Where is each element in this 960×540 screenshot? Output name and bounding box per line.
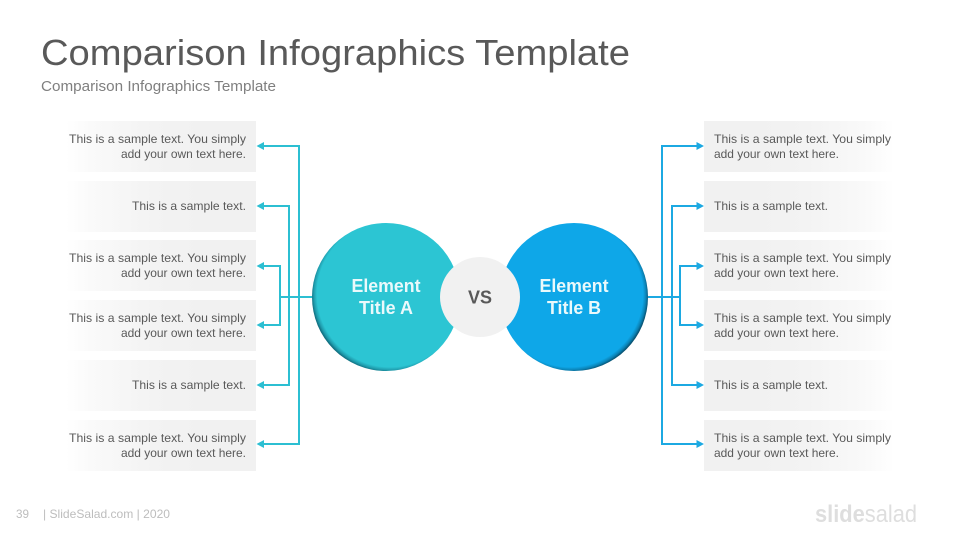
title: Comparison Infographics Template [41, 32, 630, 73]
text box: left row 5: This is a sample text. [132, 378, 246, 392]
footer: page number: 39 [16, 507, 29, 521]
text box: right row 1: add your own text here. [714, 147, 839, 161]
arrows: right connectors [648, 142, 704, 448]
logo: slidesalad: slidesalad [815, 501, 917, 528]
text box: right row 5 [704, 360, 894, 411]
text box: left row 2 [66, 181, 256, 232]
text box: right row 3 [704, 240, 894, 291]
text box: right row 5: This is a sample text. [714, 378, 828, 392]
text box: left row 5 [66, 360, 256, 411]
circle: element B [500, 223, 648, 371]
text box: left row 6: This is a sample text. You simply [69, 431, 246, 445]
panel: left text boxes [66, 121, 256, 471]
badge: VS: VS [468, 288, 492, 308]
text box: right row 1 [704, 121, 894, 172]
text box: left row 3: add your own text here. [121, 266, 246, 280]
text box: right row 6: add your own text here. [714, 446, 839, 460]
text box: right row 6: This is a sample text. You simply [714, 431, 891, 445]
circle: element B: Element [540, 275, 608, 296]
text box: left row 1: add your own text here. [121, 147, 246, 161]
text box: left row 1: This is a sample text. You simply [69, 132, 246, 146]
text box: left row 1 [66, 121, 256, 172]
text box: right row 6 [704, 420, 894, 471]
text box: left row 3: This is a sample text. You simply [69, 251, 246, 265]
text box: right row 4: This is a sample text. You simply [714, 311, 891, 325]
text box: left row 3 [66, 240, 256, 291]
circle: element A: Element [352, 275, 420, 296]
arrows: left connectors [256, 142, 312, 448]
text box: left row 6 [66, 420, 256, 471]
text box: left row 2: This is a sample text. [132, 199, 246, 213]
subtitle: Comparison Infographics Template [41, 79, 276, 95]
text box: right row 3: This is a sample text. You simply [714, 251, 891, 265]
text box: right row 4 [704, 300, 894, 351]
text box: right row 4: add your own text here. [714, 326, 839, 340]
text box: right row 2 [704, 181, 894, 232]
circle: element A [312, 223, 460, 371]
text box: left row 4: add your own text here. [121, 326, 246, 340]
text box: left row 4 [66, 300, 256, 351]
text box: right row 2: This is a sample text. [714, 199, 828, 213]
text box: right row 3: add your own text here. [714, 266, 839, 280]
circle: element A: Title A [359, 297, 413, 318]
panel: right text boxes [704, 121, 894, 471]
text box: right row 1: This is a sample text. You simply [714, 132, 891, 146]
footer: source text: | SlideSalad.com | 2020 [43, 507, 170, 521]
circle: element B: Title B [547, 297, 601, 318]
badge: VS [440, 257, 520, 337]
text box: left row 4: This is a sample text. You simply [69, 311, 246, 325]
text box: left row 6: add your own text here. [121, 446, 246, 460]
